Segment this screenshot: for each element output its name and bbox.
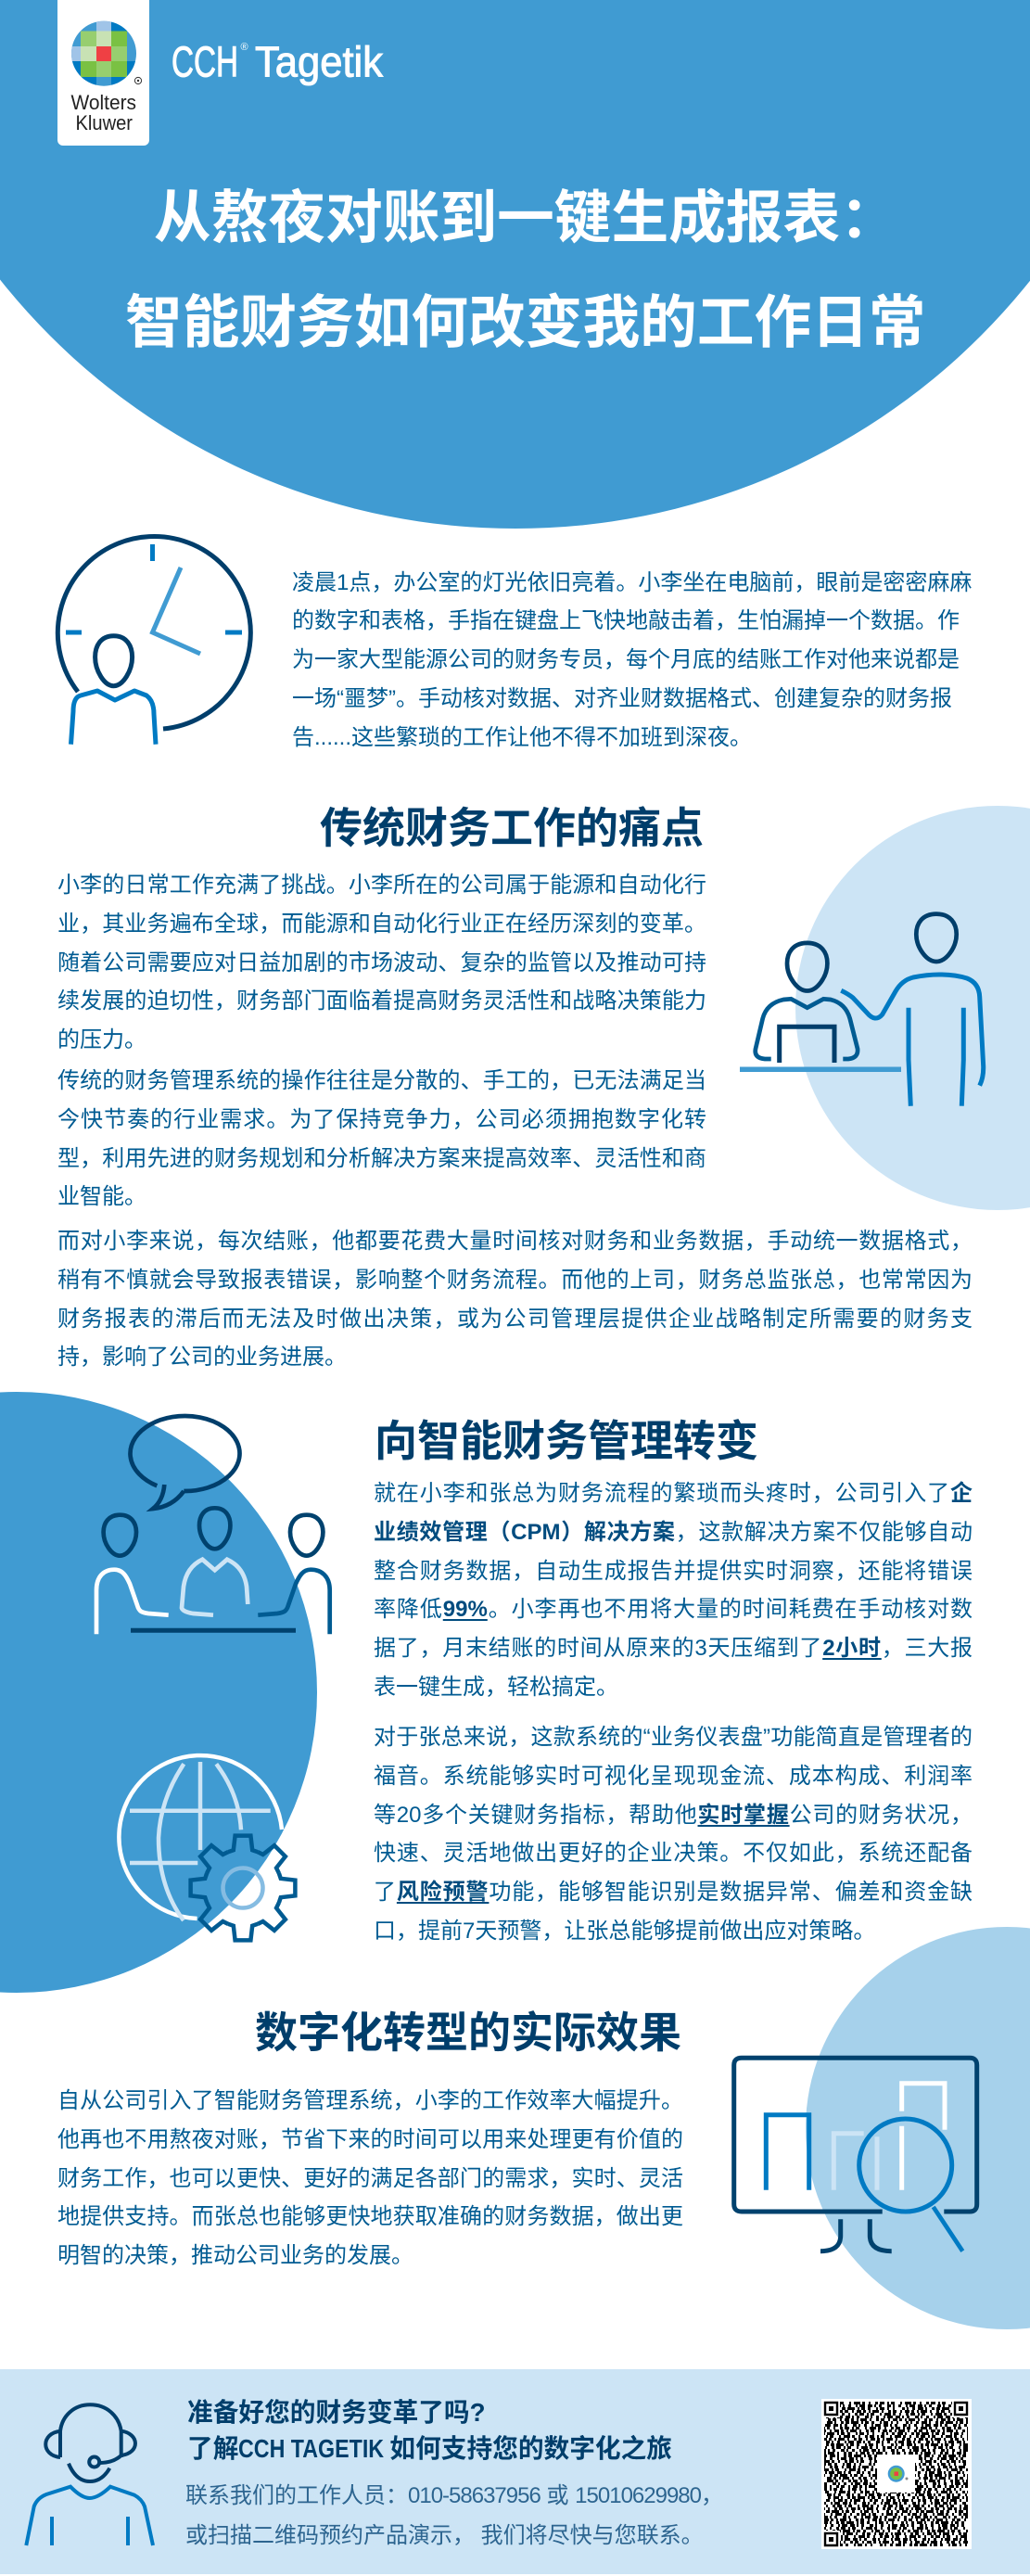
paragraph: traditional systems: 传统的财务管理系统的操作往往是分散的、手工的，已无法满足当 xyxy=(57,1068,706,1093)
logo: Wolters Kluwer: Wolters xyxy=(70,91,136,114)
paragraph: CPM solution: 据了，月末结账的时间从原来的3天压缩到了2小时，三大报 xyxy=(374,1636,973,1661)
paragraph: month-end closing: 持，影响了公司的业务进展。 xyxy=(57,1345,347,1370)
header blue shape xyxy=(0,0,1030,529)
paragraph: CPM solution: 就在小李和张总为财务流程的繁琐而头疼时，公司引入了企 xyxy=(374,1481,973,1506)
paragraph: traditional systems: 业智能。 xyxy=(57,1184,146,1209)
intro paragraph: 告......这些繁琐的工作让他不得不加班到深夜。 xyxy=(292,725,752,750)
paragraph: month-end closing xyxy=(57,1229,973,1370)
paragraph: CPM solution: 业绩效管理（CPM）解决方案，这款解决方案不仅能够自动 xyxy=(374,1520,973,1545)
heading: shift to smart finance: 向智能财务管理转变 xyxy=(375,1417,758,1465)
contact band background xyxy=(0,2369,1030,2574)
light blue circle: results xyxy=(806,1927,1030,2329)
intro paragraph: 的数字和表格，手指在键盘上飞快地敲击着，生怕漏掉一个数据。作 xyxy=(292,608,960,633)
paragraph: dashboard: 了风险预警功能，能够智能识别是数据异常、偏差和资金缺 xyxy=(374,1880,973,1905)
paragraph: traditional systems xyxy=(57,1068,706,1209)
icon: support agent with headset xyxy=(26,2404,153,2545)
intro paragraph: 一场“噩梦”。手动核对数据、对齐业财数据格式、创建复杂的财务报 xyxy=(292,686,952,711)
paragraph: dashboard: 口，提前7天预警，让张总能够提前做出应对策略。 xyxy=(374,1919,875,1944)
intro paragraph: 为一家大型能源公司的财务专员，每个月底的结账工作对他来说都是 xyxy=(292,647,960,672)
paragraph: month-end closing: 稍有不慎就会导致报表错误，影响整个财务流程。而他的上司，财务总监张总，也常常因为 xyxy=(57,1268,973,1293)
intro paragraph: 凌晨1点，办公室的灯光依旧亮着。小李坐在电脑前，眼前是密密麻麻 xyxy=(292,569,972,595)
brand name: CCH Tagetik: ® xyxy=(241,42,248,53)
icon: seated person and manager xyxy=(740,914,984,1106)
QR code xyxy=(821,2399,972,2549)
paragraph: daily challenges: 业，其业务遍布全球，而能源和自动化行业正在经历深刻的变革。 xyxy=(57,912,706,937)
call to action line 2: 了解 如何支持您的数字化之旅 xyxy=(187,2434,672,2463)
paragraph: dashboard: 等20多个关键财务指标，帮助他实时掌握公司的财务状况， xyxy=(374,1803,973,1828)
paragraph: dashboard: 福音。系统能够实时可视化呈现现金流、成本构成、利润率 xyxy=(374,1764,973,1789)
brand name: CCH Tagetik: Tagetik xyxy=(255,37,384,85)
paragraph: results: 自从公司引入了智能财务管理系统，小李的工作效率大幅提升。 xyxy=(57,2088,683,2113)
icon: clock and person xyxy=(57,536,250,745)
paragraph: daily challenges: 随着公司需要应对日益加剧的市场波动、复杂的监管以及推动可持 xyxy=(57,950,706,976)
contact line 1: 联系我们的工作人员：010-58637956 或 15010629980， xyxy=(185,2483,723,2508)
icon: globe and gear xyxy=(119,1755,295,1940)
paragraph: daily challenges xyxy=(57,873,706,1052)
contact line 2: 或扫描二维码预约产品演示， 我们将尽快与您联系。 xyxy=(185,2523,704,2548)
paragraph: daily challenges: 的压力。 xyxy=(57,1027,146,1052)
paragraph: results: 明智的决策，推动公司业务的发展。 xyxy=(57,2243,413,2268)
icon: speech bubble and three people xyxy=(96,1416,330,1634)
pale circle: pain points xyxy=(795,806,1030,1210)
paragraph: dashboard xyxy=(374,1725,973,1944)
call to action line 1: 准备好您的财务变革了吗? xyxy=(187,2398,485,2427)
icon: monitor with bar chart and magnifier xyxy=(734,2058,977,2251)
title line 2: 智能财务如何改变我的工作日常 xyxy=(125,291,926,355)
brand name: CCH Tagetik: CCH xyxy=(172,37,238,85)
paragraph: dashboard: 对于张总来说，这款系统的“业务仪表盘”功能简直是管理者的 xyxy=(374,1725,973,1750)
call to action line 2: CCH TAGETIK xyxy=(238,2434,384,2463)
blue circle: smart finance xyxy=(0,1392,317,1993)
paragraph: traditional systems: 今快节奏的行业需求。为了保持竞争力，公司必须拥抱数字化转 xyxy=(57,1107,706,1132)
paragraph: results: 财务工作，也可以更快、更好的满足各部门的需求，实时、灵活 xyxy=(57,2166,683,2191)
brand name: CCH Tagetik xyxy=(172,37,384,85)
heading: pain points: 传统财务工作的痛点 xyxy=(320,804,704,852)
heading: real results: 数字化转型的实际效果 xyxy=(255,2009,681,2057)
paragraph: month-end closing: 财务报表的滞后而无法及时做出决策，或为公司管理层提供企业战略制定所需要的财务支 xyxy=(57,1307,973,1332)
paragraph: daily challenges: 续发展的迫切性，财务部门面临着提高财务灵活性和战略决策能力 xyxy=(57,988,706,1014)
logo: Wolters Kluwer: Kluwer xyxy=(76,111,133,134)
paragraph: dashboard: 快速、灵活地做出更好的企业决策。不仅如此，系统还配备 xyxy=(374,1841,973,1866)
paragraph: CPM solution: 整合财务数据，自动生成报告并提供实时洞察，还能将错误 xyxy=(374,1559,973,1584)
intro paragraph xyxy=(292,569,972,750)
paragraph: CPM solution: 率降低99%。小李再也不用将大量的时间耗费在手动核对数 xyxy=(374,1597,973,1622)
paragraph: results: 他再也不用熬夜对账，节省下来的时间可以用来处理更有价值的 xyxy=(57,2127,683,2152)
title line 1: 从熬夜对账到一键生成报表： xyxy=(154,186,897,250)
paragraph: month-end closing: 而对小李来说，每次结账，他都要花费大量时间核对财务和业务数据，手动统一数据格式， xyxy=(57,1229,973,1254)
paragraph: CPM solution: 表一键生成，轻松搞定。 xyxy=(374,1675,618,1700)
paragraph: results xyxy=(57,2088,683,2268)
logo: Wolters Kluwer xyxy=(57,0,149,146)
paragraph: daily challenges: 小李的日常工作充满了挑战。小李所在的公司属于能源和自动化行 xyxy=(57,873,706,898)
paragraph: results: 地提供支持。而张总也能够更快地获取准确的财务数据，做出更 xyxy=(57,2204,683,2229)
paragraph: CPM solution xyxy=(374,1481,973,1700)
paragraph: traditional systems: 型，利用先进的财务规划和分析解决方案来提高效率、灵活性和商 xyxy=(57,1146,706,1171)
